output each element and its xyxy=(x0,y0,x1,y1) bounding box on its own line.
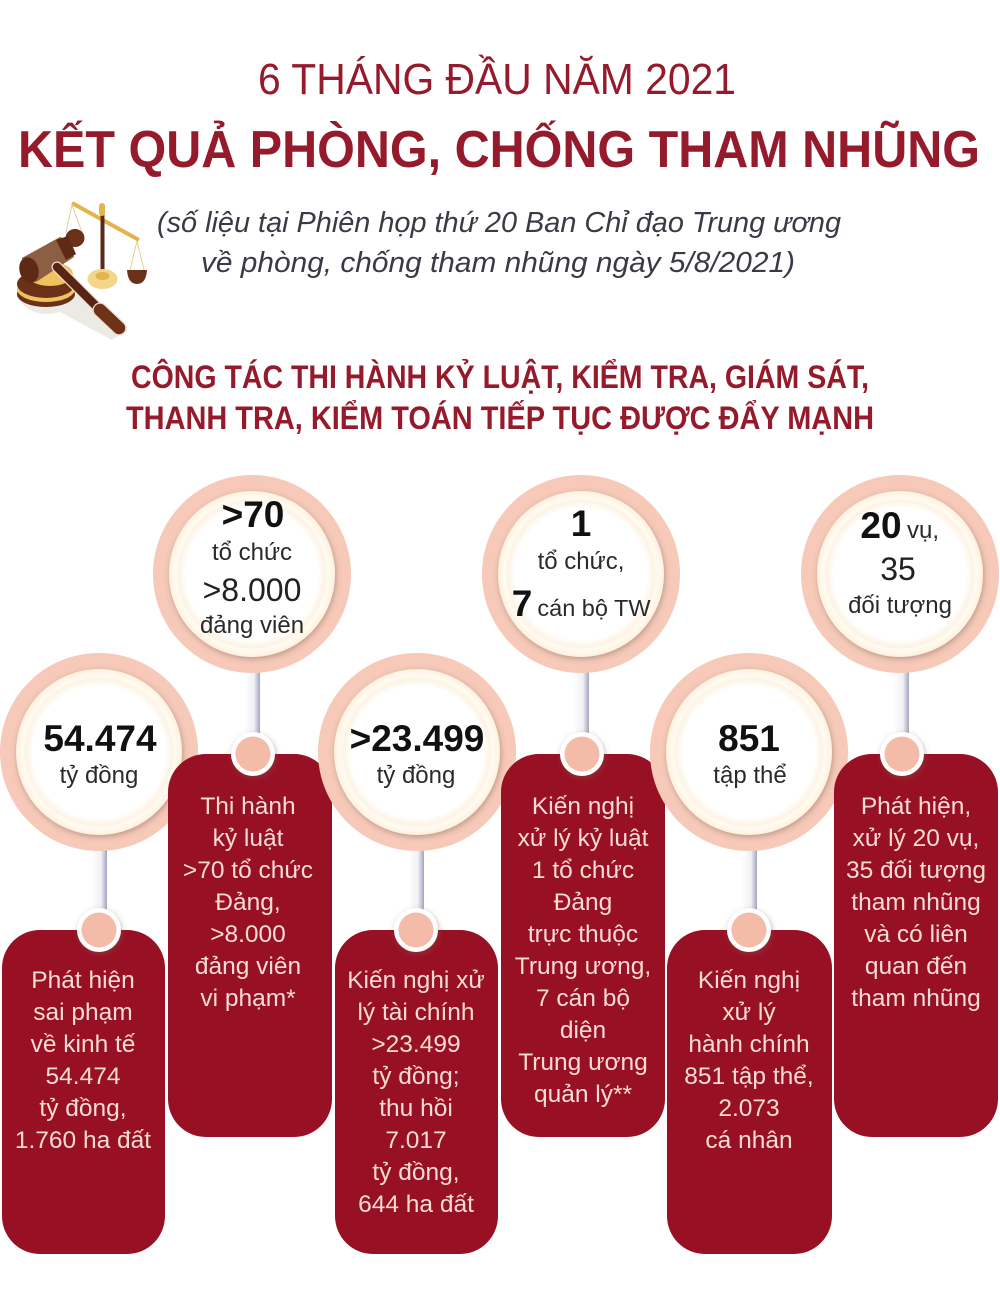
item 3: >23.499 tỷ đồng: >23.499 xyxy=(350,718,484,759)
item 6: 20 vụ, 35 đối tượng xyxy=(801,475,999,1137)
item 5: 851 tập thể: hành chính xyxy=(688,1031,810,1058)
item 4: 1 tổ chức, 7 cán bộ TW: quản lý** xyxy=(534,1081,632,1108)
item 4: 1 tổ chức, 7 cán bộ TW: Kiến nghị xyxy=(532,793,634,820)
item 3: >23.499 tỷ đồng: tỷ đồng, xyxy=(372,1159,460,1186)
item 5: 851 tập thể: 851 tập thể, xyxy=(684,1063,814,1090)
item 2: >70 tổ chức: Đảng, xyxy=(215,889,281,916)
item 4: 1 tổ chức, 7 cán bộ TW: xử lý kỷ luật xyxy=(518,825,649,852)
item 3: >23.499 tỷ đồng: tỷ đồng xyxy=(377,762,455,789)
item 2: >70 tổ chức: >8.000 xyxy=(203,572,301,608)
item 3: >23.499 tỷ đồng: Kiến nghị xử xyxy=(347,967,485,994)
section heading: CÔNG TÁC THI HÀNH KỶ LUẬT, KIỂM TRA, GIÁM SÁT, xyxy=(131,359,869,395)
item 4: 1 tổ chức, 7 cán bộ TW: trực thuộc xyxy=(528,921,638,948)
item 6: 20 vụ, 35 đối tượng: tham nhũng xyxy=(851,985,981,1012)
item 2: >70 tổ chức: >70 tổ chức xyxy=(183,857,313,884)
item 3: >23.499 tỷ đồng: lý tài chính xyxy=(357,999,475,1026)
item 3: >23.499 tỷ đồng xyxy=(318,653,516,1254)
item 2: >70 tổ chức: Thi hành xyxy=(200,793,296,820)
item 1: 54.474 tỷ đồng: sai phạm xyxy=(33,999,133,1026)
item 2: >70 tổ chức: kỷ luật xyxy=(213,825,284,852)
item 6: 20 vụ, 35 đối tượng: đối tượng xyxy=(848,592,952,619)
item 4: 1 tổ chức, 7 cán bộ TW: 1 xyxy=(571,503,591,544)
item 5: 851 tập thể: xử lý xyxy=(722,999,776,1026)
title xyxy=(18,54,980,179)
item 4: 1 tổ chức, 7 cán bộ TW: Trung ương, xyxy=(515,953,651,980)
item 6: 20 vụ, 35 đối tượng: xử lý 20 vụ, xyxy=(853,825,979,852)
subtitle: về phòng, chống tham nhũng ngày 5/8/2021) xyxy=(201,247,795,279)
item 1: 54.474 tỷ đồng: tỷ đồng, xyxy=(39,1095,127,1122)
item 6: 20 vụ, 35 đối tượng: 35 đối tượng xyxy=(846,857,986,884)
item 4: 1 tổ chức, 7 cán bộ TW xyxy=(482,475,680,1137)
item 4: 1 tổ chức, 7 cán bộ TW: Đảng xyxy=(554,889,612,916)
item 2: >70 tổ chức: tổ chức xyxy=(212,539,292,566)
title line 1: 6 THÁNG ĐẦU NĂM 2021 xyxy=(258,54,736,104)
item 6: 20 vụ, 35 đối tượng: 35 xyxy=(880,551,916,587)
item 5: 851 tập thể: cá nhân xyxy=(705,1127,793,1154)
item 3: >23.499 tỷ đồng: 644 ha đất xyxy=(358,1191,474,1218)
item 6: 20 vụ, 35 đối tượng: và có liên xyxy=(864,921,968,948)
item 3: >23.499 tỷ đồng: 7.017 xyxy=(385,1127,447,1154)
item 6: 20 vụ, 35 đối tượng: Phát hiện, xyxy=(861,793,971,820)
item 2: >70 tổ chức: vi phạm* xyxy=(200,985,296,1012)
item 2: >70 tổ chức xyxy=(153,475,351,1137)
subtitle xyxy=(157,207,841,279)
item 1: 54.474 tỷ đồng: về kinh tế xyxy=(31,1031,136,1058)
item 6: 20 vụ, 35 đối tượng: quan đến xyxy=(865,953,967,980)
item 5: 851 tập thể: 851 xyxy=(718,718,780,759)
item 4: 1 tổ chức, 7 cán bộ TW: diện xyxy=(560,1017,606,1044)
item 1: 54.474 tỷ đồng: 54.474 xyxy=(43,718,157,759)
item 3: >23.499 tỷ đồng: thu hồi xyxy=(379,1095,453,1122)
item 3: >23.499 tỷ đồng: tỷ đồng; xyxy=(372,1063,460,1090)
item 1: 54.474 tỷ đồng: tỷ đồng xyxy=(60,762,138,789)
item 5: 851 tập thể: tập thể xyxy=(713,762,787,789)
item 3: >23.499 tỷ đồng: >23.499 xyxy=(371,1031,461,1058)
item 2: >70 tổ chức: đảng viên xyxy=(200,612,304,639)
item 6: 20 vụ, 35 đối tượng: 20 xyxy=(860,505,902,546)
item 4: 1 tổ chức, 7 cán bộ TW: tổ chức, xyxy=(538,548,624,575)
item 1: 54.474 tỷ đồng: 1.760 ha đất xyxy=(15,1127,151,1154)
item 4: 1 tổ chức, 7 cán bộ TW: cán bộ TW xyxy=(537,595,651,621)
item 2: >70 tổ chức: >8.000 xyxy=(210,921,286,948)
item 1: 54.474 tỷ đồng: 54.474 xyxy=(46,1063,120,1090)
item 6: 20 vụ, 35 đối tượng: tham nhũng xyxy=(851,889,981,916)
item 4: 1 tổ chức, 7 cán bộ TW: 1 tổ chức xyxy=(532,857,634,884)
item 4: 1 tổ chức, 7 cán bộ TW: 7 xyxy=(512,583,532,624)
item 1: 54.474 tỷ đồng xyxy=(0,653,198,1254)
item 4: 1 tổ chức, 7 cán bộ TW: Trung ương xyxy=(518,1049,648,1076)
item 2: >70 tổ chức: >70 xyxy=(222,494,284,535)
item 1: 54.474 tỷ đồng: Phát hiện xyxy=(31,967,135,994)
item 2: >70 tổ chức: đảng viên xyxy=(195,953,301,980)
item 5: 851 tập thể: 2.073 xyxy=(718,1095,780,1122)
subtitle: (số liệu tại Phiên họp thứ 20 Ban Chỉ đạo Trung ương xyxy=(157,207,841,239)
item 6: 20 vụ, 35 đối tượng: vụ, xyxy=(907,517,939,544)
section heading: THANH TRA, KIỂM TOÁN TIẾP TỤC ĐƯỢC ĐẨY MẠNH xyxy=(126,400,874,436)
section heading xyxy=(126,359,874,436)
item 4: 1 tổ chức, 7 cán bộ TW: 7 cán bộ xyxy=(536,985,630,1012)
item 5: 851 tập thể: Kiến nghị xyxy=(698,967,800,994)
item 5: 851 tập thể xyxy=(650,653,848,1254)
icon: gavel and scales xyxy=(16,203,147,340)
